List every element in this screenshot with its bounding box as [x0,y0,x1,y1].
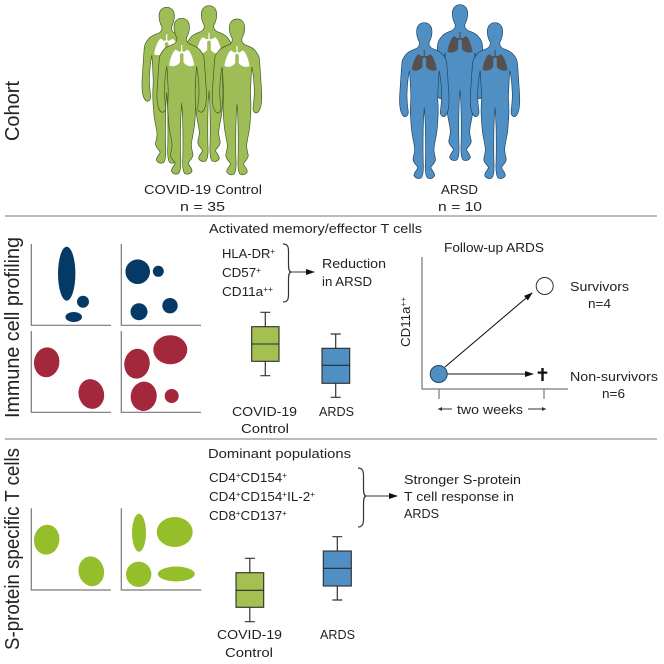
marker list: S-protein: + [236,490,241,499]
outcome labels: n=4 [588,296,611,311]
box labels: S-protein: ARDS [320,627,355,642]
section heading: immune cell profiling: Immune cell profiling [1,237,24,418]
flow plots: green populations [31,508,201,590]
marker list: S-protein: + [282,471,287,480]
marker list: immune: ++ [263,285,273,294]
icon: dagger [538,368,547,381]
cohort label: ARSD: n = 10 [438,199,482,214]
cohort label: control: n = 35 [180,199,225,214]
box labels: immune: ARDS [319,404,354,419]
icon: ARDS group [400,5,520,179]
marker list: S-protein: + [236,471,241,480]
flow plots: red populations [31,331,201,413]
cohort label: control [144,182,262,214]
text: reduction in ARSD: Reduction [322,256,386,271]
outcome labels: Survivors [570,279,630,294]
box labels: S-protein: COVID-19 [217,627,282,642]
marker list: immune: + [270,247,275,256]
box labels: immune [232,404,354,436]
follow-up chart: Follow-up ARDS [444,240,544,255]
marker list: S-protein: CD137 [241,508,282,523]
outcome labels [570,279,659,401]
brace and arrow: S-protein [358,468,397,527]
marker list: S-protein: CD154 [241,489,282,504]
box labels: S-protein: Control [225,645,273,660]
flow plots: navy populations [31,244,201,325]
cohort label: Cohort [1,81,24,141]
marker list: S-protein: + [282,490,287,499]
outcome labels: Non-survivors [570,369,659,384]
text: stronger response: T cell response in [404,489,514,504]
box plot: S-protein ARDS [323,537,351,600]
follow-up chart [398,240,568,417]
marker list: immune: HLA-DR [222,246,270,261]
brace and arrow: immune [283,244,314,302]
cohort label: ARSD [438,182,482,214]
marker list: immune: CD11a [222,284,262,299]
follow-up chart: CD11a [398,307,413,347]
box labels: S-protein [217,627,355,660]
marker list: S-protein [209,470,315,523]
heading: dominant populations: Dominant populations [208,446,352,461]
text: reduction in ARSD [322,256,386,289]
icon: COVID-19 control group [142,6,262,175]
heading: activated T cells: Activated memory/effector T cells [209,221,423,236]
marker list: S-protein: CD4 [209,489,235,504]
box plot: immune ARDS [322,334,350,397]
marker list: S-protein: IL-2 [287,489,310,504]
follow-up chart: two weeks [457,402,524,417]
text: stronger response [404,472,521,521]
follow-up chart: ++ [399,297,408,307]
marker list: S-protein: CD4 [209,470,235,485]
section heading: S-protein: S-protein specific T cells [1,448,24,650]
marker list: S-protein: + [282,509,287,518]
marker list: immune: + [256,266,261,275]
cohort label: ARSD: ARSD [441,182,478,197]
box labels: immune: COVID-19 [232,404,297,419]
text: stronger response: Stronger S-protein [404,472,521,487]
cohort label: control: COVID-19 Control [144,182,262,197]
marker list: immune: CD57 [222,265,255,280]
outcome labels: n=6 [602,386,625,401]
marker list: S-protein: CD8 [209,508,235,523]
box plot: immune control [252,312,279,376]
marker list: S-protein: + [236,509,241,518]
box plot: S-protein control [236,558,264,622]
marker list: S-protein: + [310,490,315,499]
marker list: immune [222,246,275,299]
text: stronger response: ARDS [404,506,439,521]
text: reduction in ARSD: in ARSD [322,274,372,289]
marker list: S-protein: CD154 [241,470,282,485]
box labels: immune: Control [241,421,289,436]
